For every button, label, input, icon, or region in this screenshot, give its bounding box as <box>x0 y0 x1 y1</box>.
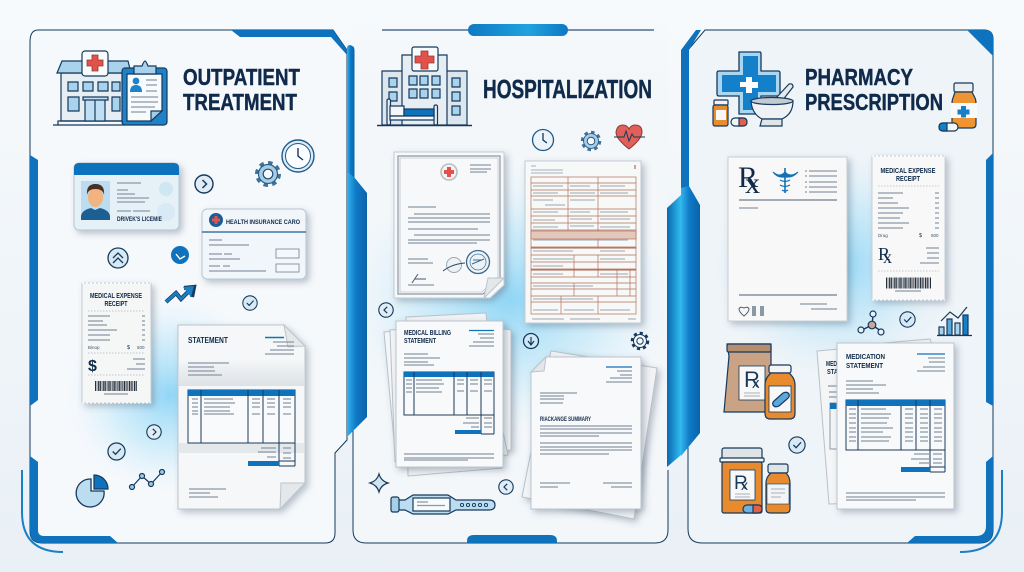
document: statement <box>178 325 305 509</box>
icon: gear outline <box>632 334 648 348</box>
document stack: medical billing statement: STATEMENT <box>404 336 436 345</box>
title: hospitalization: HOSPITALIZATION <box>483 74 652 104</box>
document stack: summary <box>522 351 657 519</box>
icon: orange bottle with capsule <box>765 365 795 419</box>
title: pharmacy prescription: PHARMACY <box>805 64 913 90</box>
icon: large prescription bottle: x <box>741 477 748 493</box>
icon: check <box>900 312 915 327</box>
document stack: medical billing statement: MEDICAL BILLING <box>404 328 451 337</box>
icon: blue check <box>171 246 189 264</box>
icon: pharmacy bottle <box>939 83 977 131</box>
icon: prescription bag: R <box>744 367 760 392</box>
icon: hospital <box>53 51 131 125</box>
receipt: medical expense: MEDICAL EXPENSE <box>90 291 142 300</box>
icon: check <box>243 296 257 310</box>
receipt: medical expense: 500 <box>137 345 145 350</box>
receipt: medical expense: RECEIPT <box>104 299 128 308</box>
panel: hospitalization <box>345 20 681 543</box>
document: prescription: x <box>745 167 760 200</box>
title: pharmacy prescription <box>805 64 943 115</box>
panel: outpatient treatment <box>22 30 347 552</box>
icon: caduceus <box>773 168 798 193</box>
icon: check <box>108 443 125 460</box>
document: statement: STATEMENT <box>188 335 229 345</box>
document: prescription: R <box>738 161 758 194</box>
card: driver's license: DRIVEK'S LICEMIE <box>117 216 162 223</box>
document stack: medication statement: MED <box>826 361 837 368</box>
document: prescription <box>728 157 847 321</box>
icon: molecule <box>858 311 884 335</box>
card: driver's license <box>74 163 179 230</box>
document stack: medication statement <box>817 339 954 509</box>
icon: chevron right small <box>147 425 161 439</box>
receipt: medical expense: RECEIPT <box>896 176 921 183</box>
document stack: medication statement: MEDICATION <box>846 352 885 361</box>
icon: small bottle <box>766 464 790 513</box>
icon: large prescription bottle <box>720 448 764 513</box>
title: pharmacy prescription: PRESCRIPTION <box>805 89 943 115</box>
receipt: medical expense: x <box>883 247 892 267</box>
icon: prescription bag <box>724 344 771 412</box>
receipt: medical expense: R <box>878 244 890 264</box>
panel frame <box>681 30 1002 552</box>
document stack: medication statement: STA <box>827 369 838 376</box>
icon: large prescription bottle: R <box>734 473 748 494</box>
panel frame <box>345 20 681 543</box>
receipt: medical expense <box>82 283 151 403</box>
icon: small bottle and pill <box>713 100 747 126</box>
icon: line chart <box>130 470 164 490</box>
panel: pharmacy prescription <box>681 30 1002 552</box>
title: outpatient treatment: TREATMENT <box>183 89 297 115</box>
icon: chevron left <box>379 303 393 317</box>
icon: wristband <box>391 495 495 514</box>
card: health insurance: HEALTH INSURANCE CARO <box>226 219 300 226</box>
icon: check <box>789 437 805 453</box>
icon: prescription bag: x <box>752 375 760 392</box>
receipt: medical expense: Drug <box>878 233 888 238</box>
receipt: medical expense: MEDICAL EXPENSE <box>880 168 936 175</box>
icon: gear <box>583 133 599 149</box>
icon: chevron right <box>195 175 213 193</box>
panel frame <box>22 30 347 552</box>
title: outpatient treatment: OUTPATIENT <box>183 64 300 90</box>
icon: sparkle <box>370 474 388 492</box>
icon: bar chart <box>937 307 972 336</box>
icon: chevron left <box>499 480 513 494</box>
receipt: medical expense: $ <box>88 358 97 375</box>
icon: medical cross with mortar <box>717 52 793 126</box>
receipt: medical expense: $ <box>127 345 130 351</box>
icon: double chevron up <box>108 248 128 268</box>
icon: clipboard <box>122 61 167 125</box>
receipt: medical expense <box>872 156 945 300</box>
document stack: medication statement: STATEMENT <box>846 361 883 370</box>
icon: clock <box>532 130 554 150</box>
receipt: medical expense: $ <box>919 233 922 239</box>
title: outpatient treatment <box>183 64 300 115</box>
icon: hospital with bed <box>377 47 472 126</box>
card: health insurance <box>202 209 306 279</box>
document stack: medical billing statement <box>384 313 511 476</box>
receipt: medical expense: Binop <box>88 345 100 350</box>
icon: arrow down <box>524 334 538 348</box>
document: letter with seal <box>394 152 504 298</box>
icon: gear <box>258 164 278 184</box>
icon: pie chart <box>76 475 108 507</box>
receipt: medical expense: 500 <box>931 233 939 238</box>
document stack: summary: RIACKANGE SUMMARY <box>540 416 591 423</box>
icon: trend arrow <box>166 286 194 302</box>
icon: clock <box>282 140 314 172</box>
document: claim form <box>525 161 641 323</box>
icon: heart <box>614 125 645 149</box>
